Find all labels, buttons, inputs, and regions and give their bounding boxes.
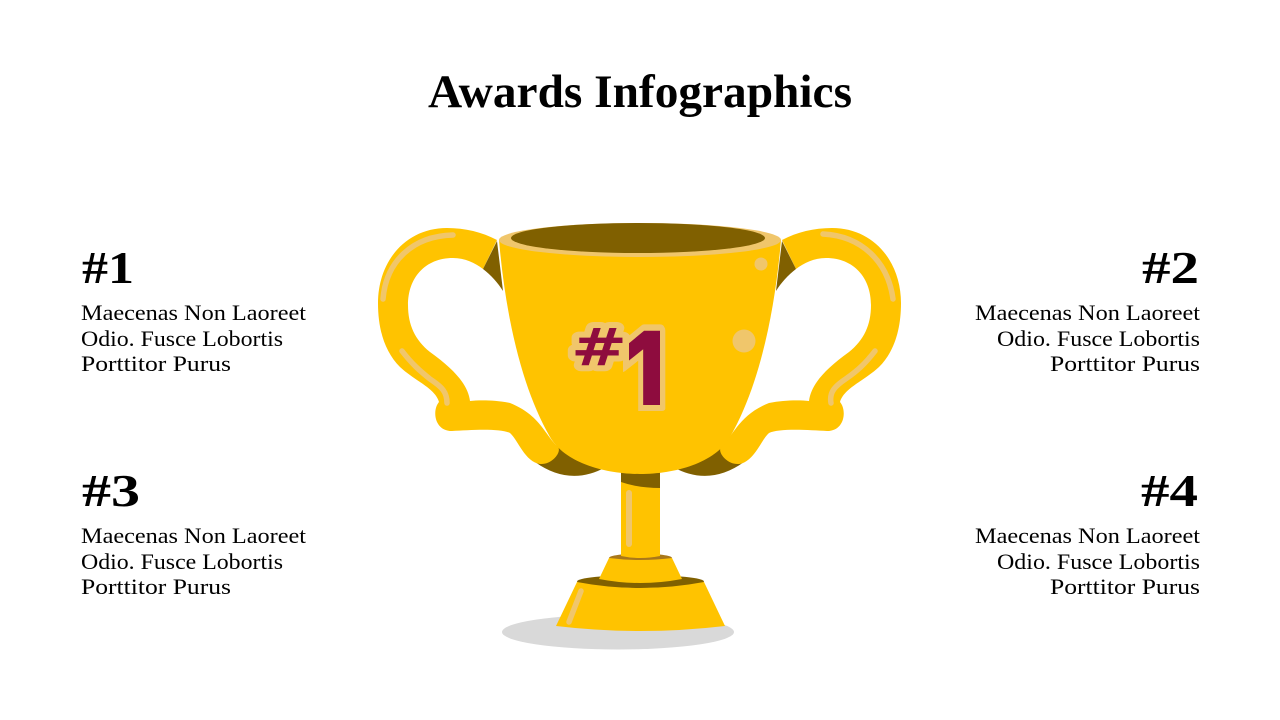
left lower connector shadow xyxy=(535,443,606,476)
text block: #1: Porttitor Purus xyxy=(81,351,231,376)
text block: #4: #4 xyxy=(1141,465,1198,516)
cup label: #1: 1 xyxy=(614,298,684,474)
text block: #2: Maecenas Non Laoreet xyxy=(975,300,1200,325)
icon: trophy xyxy=(378,223,901,650)
title: Awards Infographics xyxy=(428,66,852,118)
cup label: #1: # xyxy=(571,318,627,378)
cup label: #1 xyxy=(568,322,666,411)
text block: #1: Odio. Fusce Lobortis xyxy=(81,326,283,351)
text block: #2: Odio. Fusce Lobortis xyxy=(997,326,1200,351)
right handle highlights xyxy=(823,234,893,403)
trophy cup xyxy=(499,240,781,474)
text block: #4: Odio. Fusce Lobortis xyxy=(997,549,1200,574)
right upper connector xyxy=(776,241,796,291)
text block: #1: Maecenas Non Laoreet xyxy=(81,300,306,325)
text block: #4: Porttitor Purus xyxy=(1050,574,1200,599)
cup dots xyxy=(732,258,768,352)
left handle highlights xyxy=(383,235,453,403)
text block: #1 xyxy=(81,242,306,376)
cup opening xyxy=(511,223,765,253)
text block: #3: Maecenas Non Laoreet xyxy=(81,523,306,548)
cup rim xyxy=(499,223,781,257)
text block: #3: Porttitor Purus xyxy=(81,574,231,599)
text block: #4: Maecenas Non Laoreet xyxy=(975,523,1200,548)
trophy base xyxy=(556,554,725,631)
text block: #3: Odio. Fusce Lobortis xyxy=(81,549,283,574)
cup label: #1: 1 xyxy=(614,298,684,474)
text block: #2: #2 xyxy=(1142,242,1199,293)
text block: #2 xyxy=(975,242,1200,376)
right lower connector shadow xyxy=(673,443,744,476)
text block: #3: #3 xyxy=(82,465,140,516)
text block: #1: #1 xyxy=(82,242,134,293)
text block: #3 xyxy=(81,465,306,599)
right handle xyxy=(720,228,901,464)
text block: #2: Porttitor Purus xyxy=(1050,351,1200,376)
trophy shadow xyxy=(502,614,734,650)
left handle xyxy=(378,228,559,464)
text block: #4 xyxy=(975,465,1200,599)
trophy stem xyxy=(621,465,660,558)
left upper connector xyxy=(483,241,503,291)
